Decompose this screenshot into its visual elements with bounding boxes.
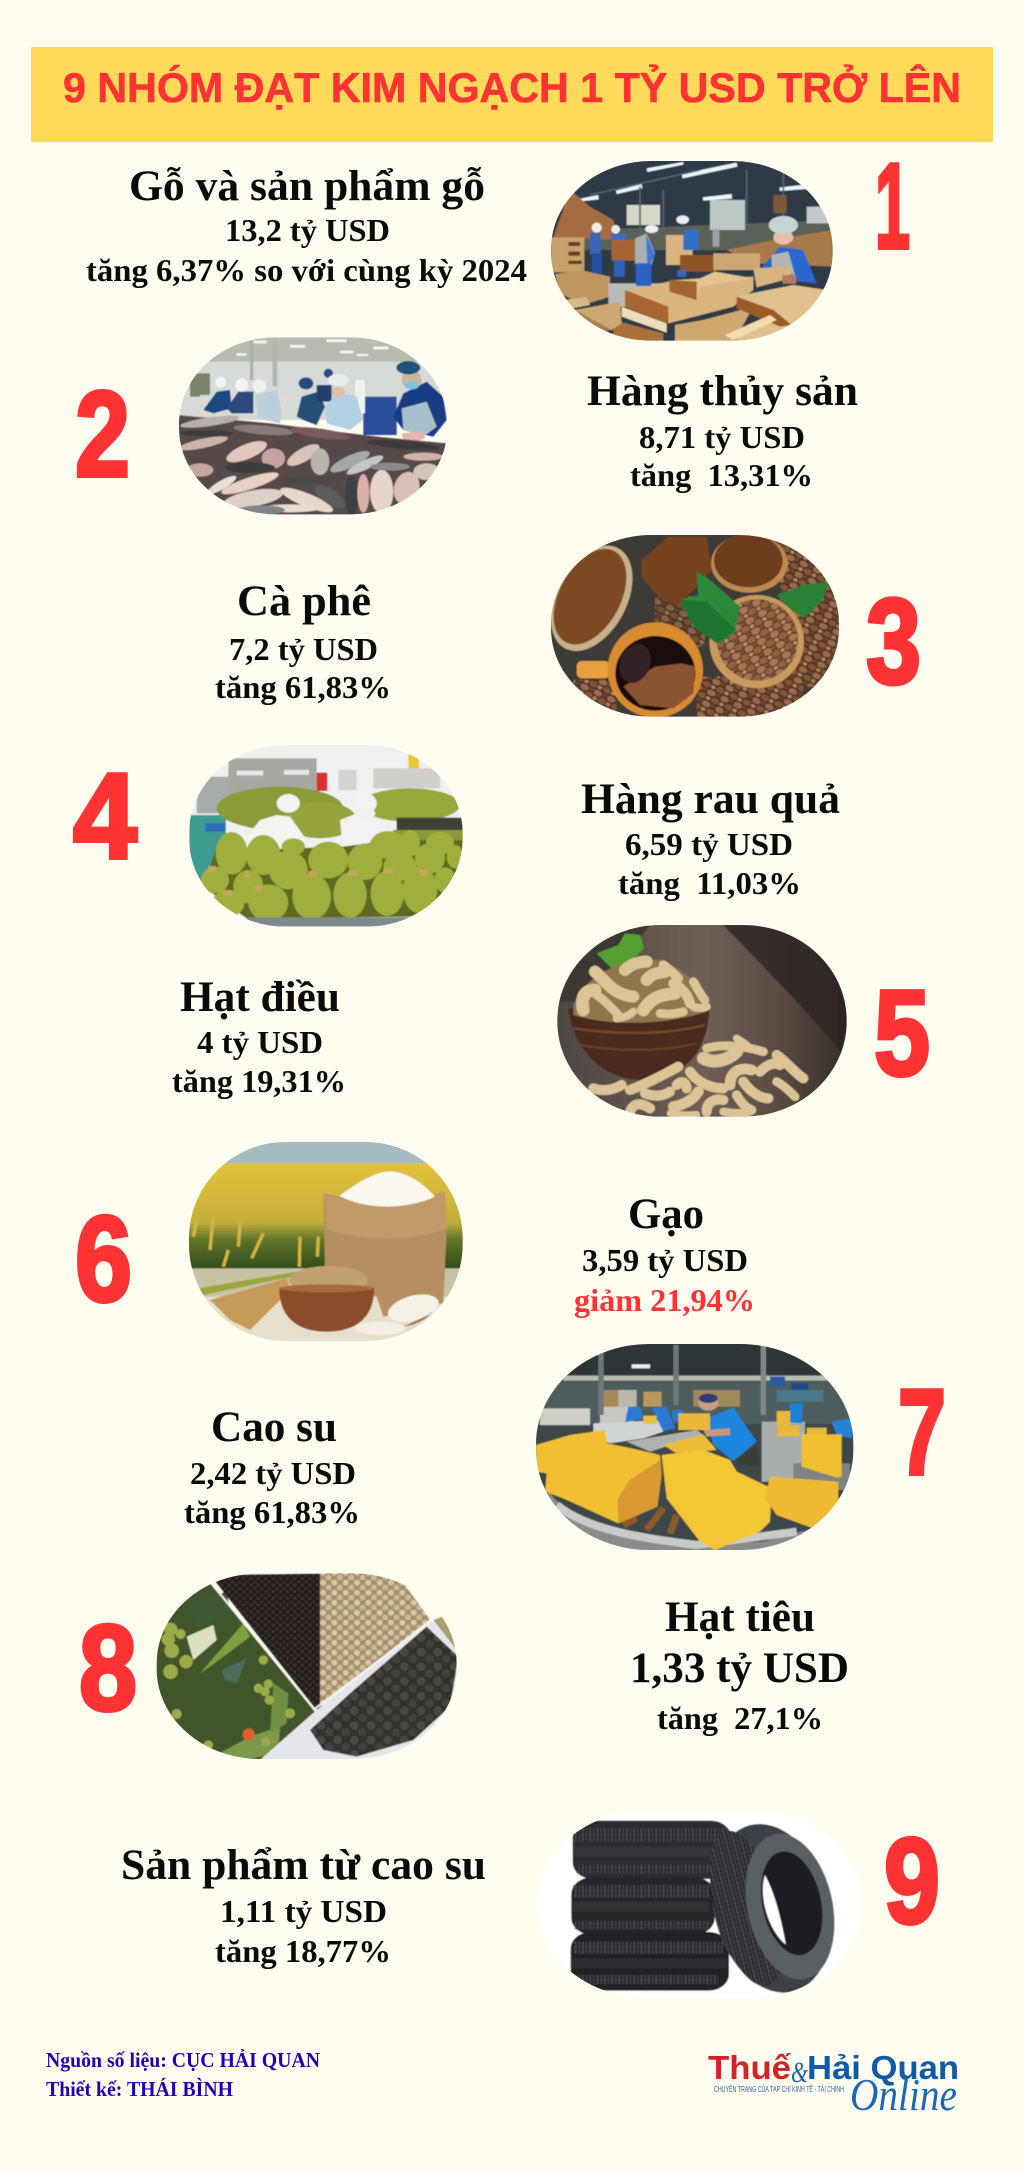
number 3: 3 (866, 573, 921, 709)
text: rubber products: 1,11 tỷ USD (220, 1893, 387, 1929)
text: pepper: 1,33 tỷ USD (630, 1645, 849, 1692)
text: rice: giảm 21,94% (574, 1282, 755, 1318)
text: seafood: Hàng thủy sản (587, 368, 858, 415)
photo: rice (187, 1140, 467, 1343)
title banner (31, 47, 993, 142)
panel: item 2 seafood (75, 337, 858, 517)
text: coffee: Cà phê (237, 578, 371, 625)
logo: Thuế & Hải Quan Online: Hải Quan (807, 2049, 959, 2086)
number 8: 8 (79, 1600, 137, 1736)
text: rubber: tăng 61,83% (184, 1494, 360, 1530)
title banner: 9 NHÓM ĐẠT KIM NGẠCH 1 TỶ USD TRỞ LÊN (63, 63, 961, 111)
panel: item 5 cashew (172, 922, 930, 1122)
text: pepper: tăng 27,1% (657, 1700, 823, 1736)
number 4: 4 (73, 748, 137, 884)
text: wood: 13,2 tỷ USD (225, 212, 390, 248)
text: wood: tăng 6,37% so với cùng kỳ 2024 (86, 252, 527, 288)
photo: tires (533, 1807, 867, 2006)
text: fruit: tăng 11,03% (618, 865, 801, 901)
logo: Thuế & Hải Quan Online: Thuế (708, 2049, 792, 2086)
panel: item 3 coffee (215, 532, 921, 720)
number 1: 1 (875, 138, 910, 274)
panel: item 8 pepper (79, 1570, 849, 1763)
panel: item 1 wood (86, 161, 910, 341)
text: wood (86, 163, 527, 288)
text: rice (574, 1191, 755, 1318)
text: fruit: 6,59 tỷ USD (625, 826, 793, 862)
text: coffee (215, 578, 391, 705)
text: rubber products: tăng 18,77% (215, 1933, 391, 1969)
text: rubber products (121, 1842, 486, 1969)
number 7: 7 (898, 1364, 946, 1500)
text: rubber: Cao su (211, 1404, 337, 1451)
text: seafood: tăng 13,31% (630, 457, 813, 493)
photo: coffee (534, 532, 843, 720)
source credits: Nguồn số liệu: CỤC HẢI QUAN (46, 2048, 320, 2072)
text: pepper: Hạt tiêu (665, 1594, 815, 1641)
text: rice: Gạo (628, 1191, 704, 1238)
photo: fish processing (177, 337, 453, 517)
text: rubber (184, 1404, 360, 1530)
photo: wood factory (547, 157, 840, 347)
fish bed (177, 415, 453, 517)
text: rubber products: Sản phẩm từ cao su (121, 1842, 486, 1889)
logo: Thuế & Hải Quan Online (708, 2049, 959, 2120)
text: fruit (581, 776, 840, 901)
logo: Thuế & Hải Quan Online: CHUYÊN TRANG CỦA TẠP CHÍ KINH TẾ - TÀI CHÍNH (714, 2084, 844, 2094)
text: wood: Gỗ và sản phẩm gỗ (129, 163, 485, 210)
panel: item 9 rubber products (121, 1807, 940, 2006)
number 2: 2 (75, 366, 130, 502)
workers (203, 390, 232, 413)
text: pepper (630, 1594, 849, 1736)
text: fruit: Hàng rau quả (581, 776, 840, 823)
number 9: 9 (884, 1813, 940, 1949)
panel: item 7 rubber (184, 1342, 946, 1555)
panel: item 4 fruit (73, 743, 840, 930)
source credits (46, 2048, 320, 2101)
panel: item 6 rice (75, 1140, 755, 1343)
photo: pepper (153, 1570, 460, 1763)
text: rubber: 2,42 tỷ USD (190, 1455, 356, 1491)
source credits: Thiết kế: THÁI BÌNH (46, 2077, 233, 2101)
text: coffee: tăng 61,83% (215, 669, 391, 705)
text: cashew (172, 974, 346, 1099)
lumber (623, 277, 753, 323)
photo: rubber blocks (533, 1342, 857, 1555)
photo: cashew nuts (553, 922, 853, 1122)
number 5: 5 (874, 965, 930, 1101)
workers (590, 233, 601, 254)
text: seafood (587, 368, 858, 493)
logo: Thuế & Hải Quan Online: Online (850, 2069, 957, 2120)
photo: durian (187, 743, 467, 930)
text: seafood: 8,71 tỷ USD (639, 419, 805, 455)
text: rice: 3,59 tỷ USD (582, 1242, 748, 1278)
text: coffee: 7,2 tỷ USD (229, 631, 378, 667)
text: cashew: Hạt điều (180, 974, 340, 1021)
text: cashew: 4 tỷ USD (197, 1024, 323, 1060)
text: cashew: tăng 19,31% (172, 1063, 346, 1099)
logo: Thuế & Hải Quan Online: & (791, 2056, 808, 2089)
conveyor (548, 1492, 810, 1550)
number 6: 6 (75, 1191, 132, 1327)
